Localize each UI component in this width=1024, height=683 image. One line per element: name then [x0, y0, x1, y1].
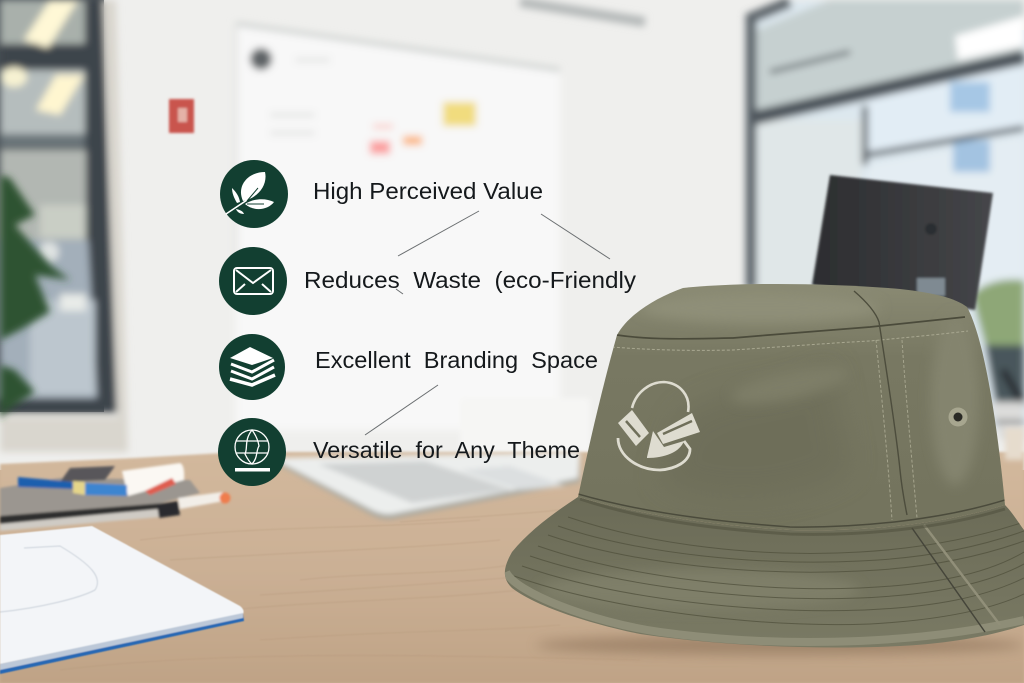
item 2: Reduces Waste (eco-Friendly [219, 247, 637, 315]
connector lines [365, 211, 610, 435]
item 3: Excellent Branding Space [219, 334, 598, 400]
item 1: High Perceived Value [220, 160, 543, 228]
icon: leaf [220, 160, 288, 228]
item 4: Versatile for Any Theme [218, 418, 580, 486]
background: wooden desk [0, 452, 1024, 683]
label: Reduces Waste (eco-Friendly [304, 267, 637, 293]
icon: stacked layers [219, 334, 285, 400]
icon: globe [218, 418, 286, 486]
hat shadow [536, 635, 1024, 655]
hat brim [504, 497, 1024, 648]
background: monitor [812, 175, 993, 310]
background: pens and folders on desk [0, 463, 230, 531]
background: right window [745, 0, 1024, 440]
background: notebook [0, 526, 244, 674]
hat eyelet [948, 408, 968, 426]
background: whiteboard [236, 22, 560, 430]
background: red wall box [169, 99, 194, 133]
background: ceiling beam [520, 2, 645, 22]
icon: envelope [219, 247, 287, 315]
hat logo [618, 382, 700, 470]
background: plant [0, 175, 70, 420]
label: Excellent Branding Space [315, 347, 598, 373]
background: white item behind [460, 398, 590, 458]
label: Versatile for Any Theme [313, 437, 580, 463]
label: High Perceived Value [313, 178, 543, 204]
background: laptop [270, 452, 580, 519]
bucket hat [500, 280, 1024, 660]
hat crown [578, 284, 1005, 530]
background: left window [0, 0, 128, 452]
